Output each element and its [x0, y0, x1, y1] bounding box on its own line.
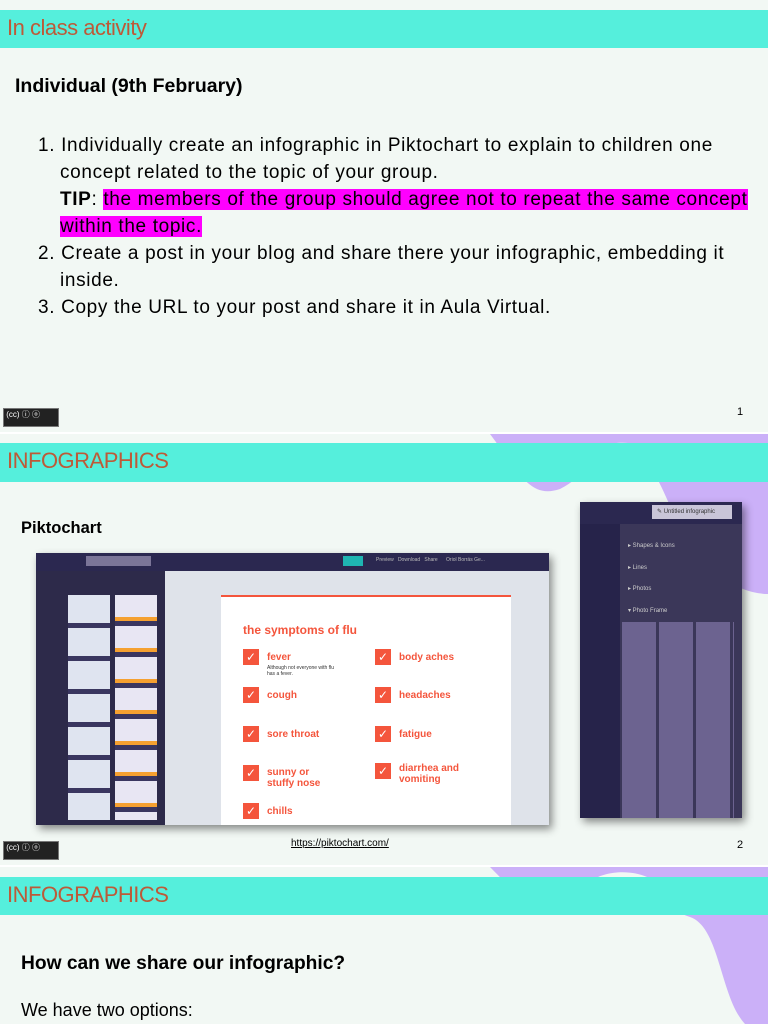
page number 1: 1	[737, 406, 743, 418]
subheading: Individual: Individual (9th February)	[15, 75, 243, 97]
infographic page: ✓	[378, 688, 388, 702]
title bar: In class activity: In class activity	[7, 15, 146, 40]
source link: https://piktochart.com/	[291, 838, 389, 849]
infographic page: fatigue	[399, 729, 432, 740]
infographic page: the symptoms of flu	[243, 623, 357, 637]
infographic page: stuffy nose	[267, 778, 320, 789]
title bar: INFOGRAPHICS (slide 2)	[0, 443, 768, 482]
page number 2: 2	[737, 839, 743, 851]
thumbnails column	[68, 595, 110, 820]
infographic page: ✓	[378, 650, 388, 664]
title bar: In class activity	[0, 10, 768, 48]
infographic page: ✓	[246, 688, 256, 702]
title bar: INFOGRAPHICS (slide 3): INFOGRAPHICS	[7, 882, 168, 907]
numbered instruction list: concept related to the topic of your group.	[60, 162, 439, 183]
infographic page: sunny or	[267, 767, 309, 778]
infographic page: headaches	[399, 690, 451, 701]
infographic page: ✓	[246, 766, 256, 780]
numbered instruction list: 2. Create a post in your blog and share there your infographic, embedding it	[38, 243, 724, 264]
infographic page: ✓	[378, 764, 388, 778]
icon: CC license: (cc) ⓘ ⓞ	[6, 843, 40, 852]
infographic page: ✓	[378, 727, 388, 741]
text: two options: We have two options:	[21, 1000, 193, 1020]
infographic page: ✓	[246, 727, 256, 741]
decorative purple blob slide 3	[490, 867, 768, 1024]
icon: CC license	[3, 408, 59, 427]
numbered instruction list: TIP: the members of the group should agree not to repeat the same concept	[60, 189, 748, 210]
editor top bar	[36, 553, 549, 571]
screenshot: Piktochart side panel: ▾ Photo Frame	[628, 608, 667, 614]
infographic page: body aches	[399, 652, 454, 663]
subheading: How can we share: How can we share our infographic?	[21, 953, 345, 974]
icon: CC license: (cc) ⓘ ⓞ	[6, 410, 40, 419]
numbered instruction list: 3. Copy the URL to your post and share it in Aula Virtual.	[38, 297, 551, 318]
numbered instruction list: within the topic.	[60, 216, 202, 237]
infographic page: diarrhea and	[399, 763, 459, 774]
infographic page: Although not everyone with flu	[267, 665, 334, 671]
numbered instruction list: inside.	[60, 270, 119, 291]
icon: CC license	[3, 841, 59, 860]
screenshot: Piktochart editor	[36, 553, 549, 825]
infographic page: ✓	[246, 650, 256, 664]
screenshot: Piktochart side panel: ▸ Lines	[628, 564, 647, 570]
infographic page: chills	[267, 806, 293, 817]
infographic page	[221, 595, 511, 825]
screenshot: Piktochart side panel: ▸ Photos	[628, 586, 651, 592]
screenshot: Piktochart side panel: ▸ Shapes & Icons	[628, 543, 675, 549]
infographic page: cough	[267, 690, 297, 701]
title bar: INFOGRAPHICS (slide 2): INFOGRAPHICS	[7, 448, 168, 473]
infographic page: fever	[267, 652, 291, 663]
slide 1 background	[0, 0, 768, 432]
infographic page: sore throat	[267, 729, 319, 740]
subheading: Piktochart: Piktochart	[21, 519, 102, 537]
infographic page: has a fever.	[267, 671, 293, 677]
screenshot: Piktochart side panel: ✎ Untitled infographic	[657, 509, 715, 515]
numbered instruction list	[38, 135, 748, 318]
editor top bar: Preview Download Share Oriol Borrás Ge...	[376, 557, 485, 563]
numbered instruction list: 1. Individually create an infographic in Piktochart to explain to children one	[38, 135, 713, 156]
canvas area	[165, 571, 549, 825]
screenshot: Piktochart side panel	[580, 502, 742, 818]
infographic page: vomiting	[399, 774, 441, 785]
decorative purple blob slide 2	[490, 434, 768, 594]
title bar: INFOGRAPHICS (slide 3)	[0, 877, 768, 915]
infographic page: ✓	[246, 804, 256, 818]
